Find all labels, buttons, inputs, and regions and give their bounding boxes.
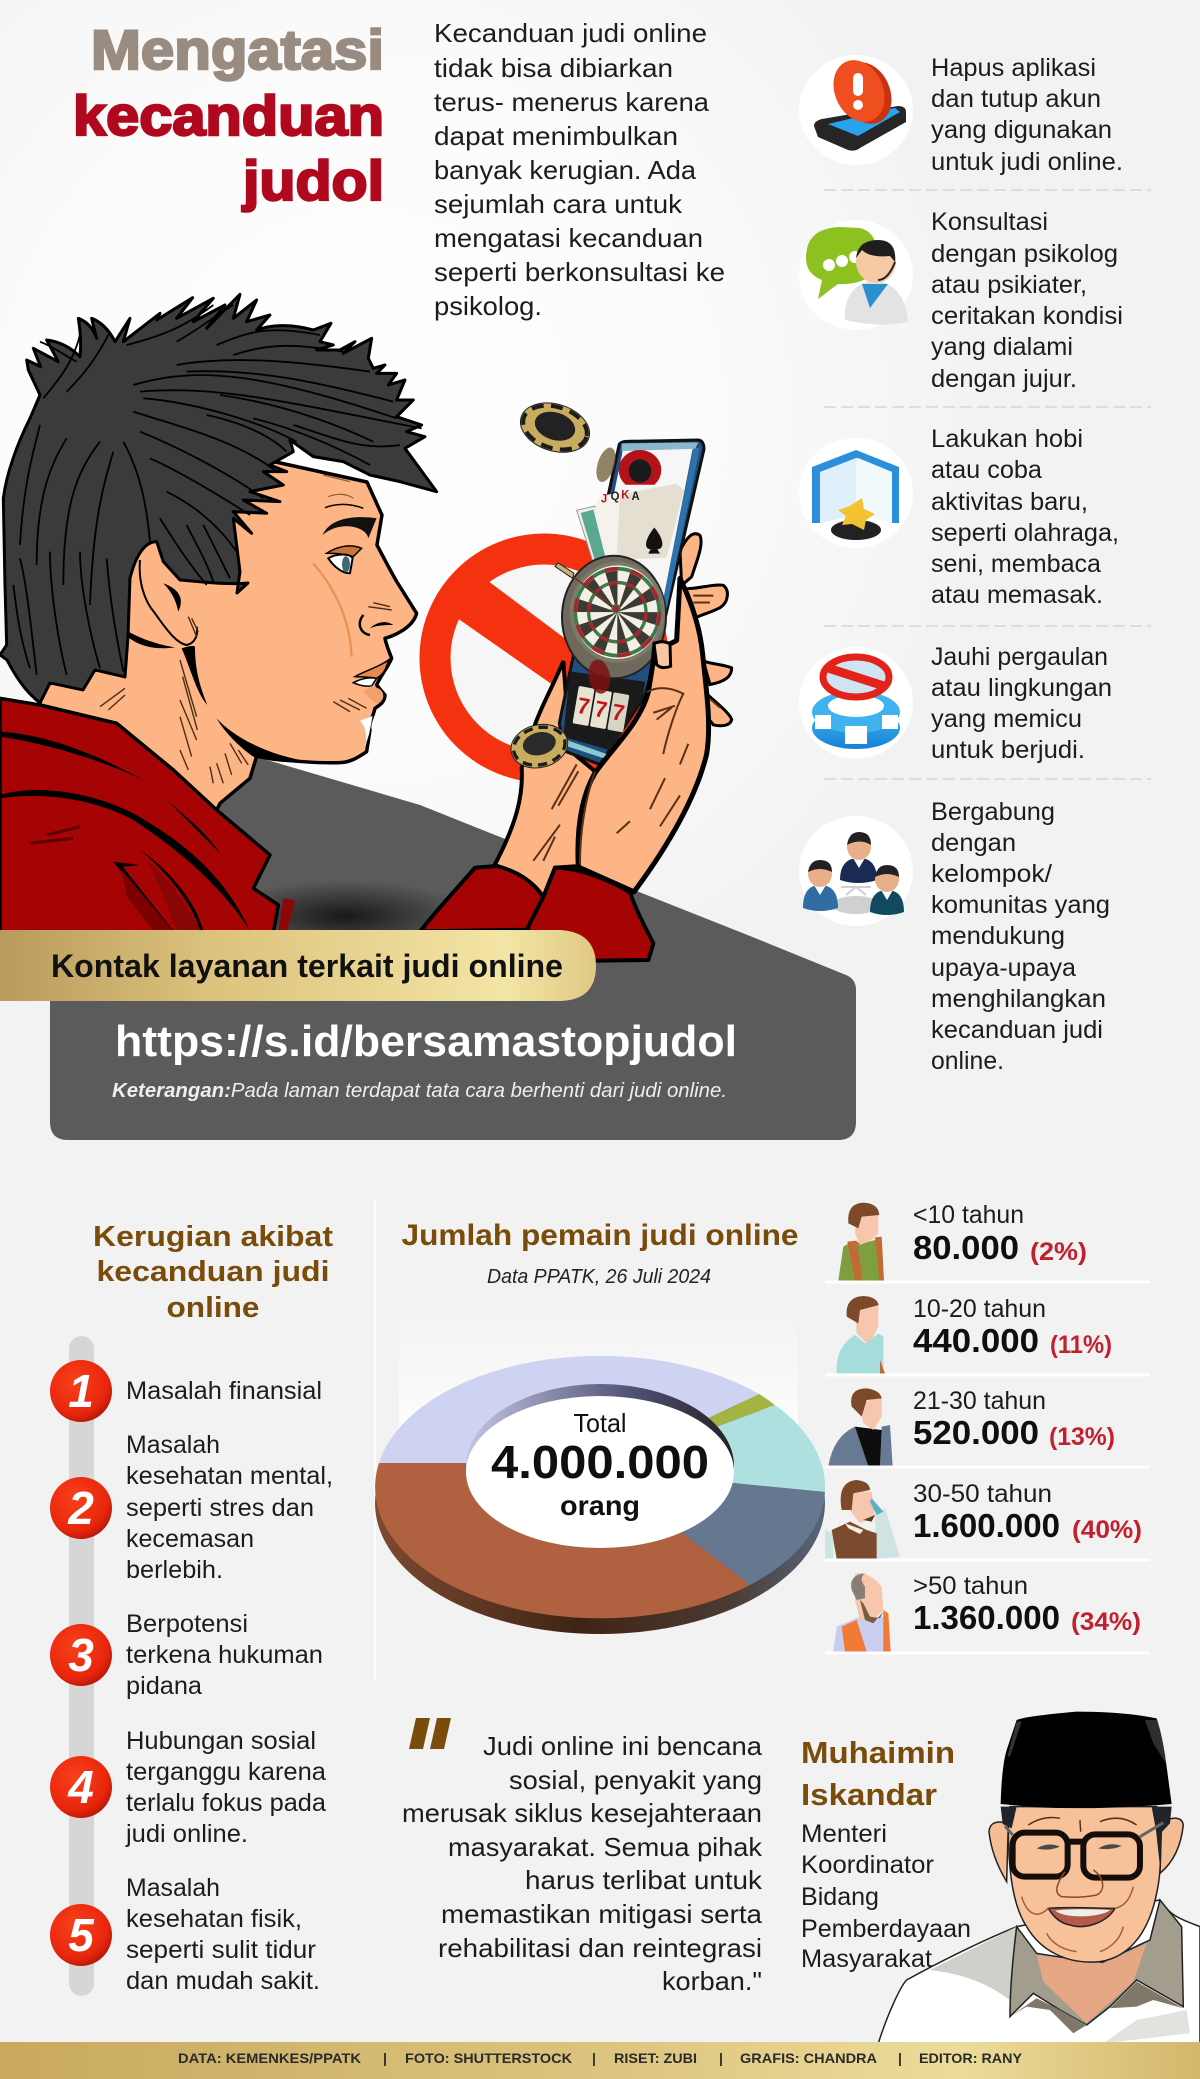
card letters: K [621,489,630,502]
loss 3: terkena hukuman [126,1641,323,1669]
step 4 text [931,643,1112,764]
hole rim [466,1384,734,1548]
segment: 34% lavender [379,1356,759,1470]
footer credits: | [383,2050,387,2066]
loss 5: Masalah [126,1874,220,1902]
age row: 30-50: 1.600.000 [913,1507,1060,1544]
icon: community group [799,816,913,926]
step 1 text: Hapus aplikasi [931,54,1096,82]
intro text [434,18,725,321]
job title: Iskandar [801,1777,937,1812]
contact banner: Kontak layanan terkait judi online [51,948,563,984]
spade [646,527,662,554]
donut total: 4.000.000 [491,1436,709,1488]
forehead lines [323,475,353,498]
phone [555,440,704,764]
sleeves [420,866,543,931]
age row: under 10: <10 tahun [913,1201,1024,1229]
heading: number of players: Jumlah pemain judi online [402,1219,798,1252]
donut chart [375,1305,825,1634]
icon: psychologist [799,220,913,330]
step 4 text: Jauhi pergaulan [931,643,1108,671]
job title [801,1735,971,1973]
panel: losses list [50,1336,333,1996]
hand wrinkles [533,596,720,864]
icon: chip bottom [507,719,572,773]
step 2 text: dengan jujur. [931,365,1077,393]
step 5 text: Bergabung [931,798,1055,826]
card letters: Q [611,491,619,503]
dart [555,563,613,606]
shadow under the arms [220,880,470,952]
step 5 text: upaya-upaya [931,954,1076,982]
nose [1057,1870,1103,1897]
contact banner [0,930,596,1001]
intro text: tidak bisa dibiarkan [434,53,673,83]
step 3 text: Lakukan hobi [931,425,1083,453]
step 1 text: untuk judi online. [931,148,1123,176]
loss 2 [50,1431,333,1584]
avatar: elder [833,1573,891,1652]
neck hatching [100,603,392,783]
brows and lines [1028,1817,1137,1832]
jaw shadow [217,718,310,762]
title [73,18,384,212]
collar [1010,1900,1183,2025]
footer credits: FOTO: SHUTTERSTOCK [405,2050,572,2066]
eyebrow [323,517,377,538]
intro text: sejumlah cara untuk [434,189,683,219]
segment: 40% brown [375,1463,750,1618]
donut total: orang [560,1490,640,1521]
quote text: harus terlibat untuk [525,1865,763,1895]
job title: Bidang [801,1883,879,1911]
job title: Menteri [801,1820,887,1848]
quote text: memastikan mitigasi serta [441,1899,763,1929]
step 2 text: Konsultasi [931,208,1048,236]
step 3 text [931,425,1119,609]
shirt [878,1900,1200,2043]
footer credits: | [592,2050,596,2066]
illustration: man's hair and eye [0,294,437,703]
loss 4: terganggu karena [126,1758,326,1786]
loss 2: Masalah [126,1431,220,1459]
step 5 text [931,798,1110,1075]
shirt [0,698,278,933]
icon: prohibition sign [435,549,653,767]
neck [1037,1943,1147,2023]
footer credits: GRAFIS: CHANDRA [740,2050,877,2066]
donut total: Total [574,1408,626,1438]
illustration: ear lines [128,560,198,648]
loss 2: kecemasan [126,1525,254,1553]
icon: open book and star [799,438,913,548]
quote text: masyarakat. Semua pihak [448,1832,763,1862]
donut total [491,1408,709,1521]
step 5 text: kecanduan judi [931,1016,1103,1044]
loss 2: 2 [67,1482,94,1534]
quote text: sosial, penyakit yang [509,1765,762,1795]
step 2 text: dengan psikolog [931,240,1118,268]
mouth [353,660,388,703]
step 2 text: yang dialami [931,333,1073,361]
loss 1 [50,1360,322,1422]
step 5 text: dengan [931,829,1016,857]
footer credits: | [898,2050,902,2066]
heading: losses [93,1221,333,1324]
step 5 text: mendukung [931,922,1065,950]
hair [0,294,437,703]
step 1 text: yang digunakan [931,116,1112,144]
shirt folds [0,732,250,931]
job title: Masyarakat [801,1945,932,1973]
face and neck [40,460,417,810]
step 3 text: atau memasak. [931,581,1103,609]
hair strands [13,305,422,675]
job title: Muhaimin [801,1735,955,1770]
grey contact panel [50,740,856,1140]
step 5 text: kelompok/ [931,860,1052,888]
intro text: banyak kerugian. Ada [434,155,697,185]
glasses [1013,1833,1140,1878]
quote mark [409,1718,451,1749]
intro text: mengatasi kecanduan [434,223,703,253]
red chip [618,450,662,485]
footer credits: DATA: KEMENKES/PPATK [178,2050,361,2066]
step 1 text: dan tutup akun [931,85,1101,113]
age row: 10-20: 440.000 [913,1322,1039,1359]
loss 1: Masalah finansial [126,1377,322,1405]
cards [577,506,609,573]
step 5 text: komunitas yang [931,891,1110,919]
intro text: seperti berkonsultasi ke [434,257,725,287]
avatar: teen [837,1296,885,1373]
loss 4: 4 [67,1761,94,1813]
step 3 text: atau coba [931,456,1042,484]
face lines [1022,1887,1133,1952]
intro text: terus- menerus karena [434,87,710,117]
panel: age groups [825,1201,1150,1653]
age row: 21-30: 520.000 [913,1414,1039,1451]
eyes [1037,1845,1060,1850]
loss 3 [50,1610,323,1700]
step 4 text: atau lingkungan [931,674,1112,702]
footer credits [0,2042,1200,2079]
panel: steps list [799,52,1151,1075]
card letters [601,489,640,506]
age row: under 10: 80.000 [913,1229,1019,1266]
step 2 text: atau psikiater, [931,271,1087,299]
segment: 13% slate [600,1470,825,1585]
side hair [1001,1807,1172,1867]
step 4 text: untuk berjudi. [931,736,1085,764]
illustration: man's face and shirt [0,460,417,933]
loss 4: judi online. [125,1820,248,1848]
quote text [402,1731,763,1996]
age row: 30-50: (40%) [1072,1516,1142,1544]
footer credits: RISET: ZUBI [614,2050,697,2066]
hole [466,1396,734,1548]
slot machine 777: 7 [593,696,609,723]
step 2 text [931,208,1123,393]
peci cap [1001,1712,1172,1808]
title: kecanduan [73,84,384,147]
loss 2: berlebih. [126,1556,223,1584]
intro text: Kecanduan judi online [434,18,707,48]
portrait: Muhaimin Iskandar [878,1712,1200,2043]
age row: 10-20 [825,1295,1150,1375]
age row: 30-50 [825,1480,1150,1560]
avatar: adult with phone [825,1480,900,1559]
age row: 21-30 [825,1387,1150,1467]
age row: 21-30: (13%) [1049,1423,1115,1451]
title: judol [242,149,384,212]
scar [313,563,352,657]
card letters: J [601,494,607,506]
card letters: A [632,491,640,503]
age row: under 10: (2%) [1030,1238,1087,1266]
slot machine 777: 7 [610,699,626,726]
heading: losses: online [166,1292,260,1324]
footer credits: | [719,2050,723,2066]
icon: chip top [515,395,595,460]
back fingers [680,534,732,726]
step 2 text: ceritakan kondisi [931,302,1123,330]
age row: over 50: (34%) [1071,1608,1141,1636]
age row: 30-50: 30-50 tahun [913,1480,1052,1508]
segment: 11% teal [600,1405,825,1492]
heading: losses: kecanduan judi [96,1256,330,1288]
footer credits: EDITOR: RANY [919,2050,1023,2066]
step 3 text: seperti olahraga, [931,519,1119,547]
nose [370,622,393,628]
title: Mengatasi [91,18,384,81]
eye [327,546,362,573]
step 5 text: online. [931,1047,1004,1075]
data source: Data PPATK, 26 Juli 2024 [487,1266,711,1288]
contact url: https://s.id/bersamastopjudol [115,1017,737,1066]
age row: over 50: 1.360.000 [913,1599,1060,1636]
loss 4 [50,1727,326,1848]
chin highlight [360,716,373,751]
intro text: psikolog. [434,291,542,321]
age row: 21-30: 21-30 tahun [913,1387,1046,1415]
loss 3: 3 [68,1629,94,1681]
loss 5 [50,1874,320,1995]
age row: 10-20: (11%) [1050,1331,1112,1359]
quote text: rehabilitasi dan reintegrasi [438,1933,762,1963]
quote text: Judi online ini bencana [483,1731,763,1761]
illustration: hands, phone and gambling items [420,395,732,961]
loss 5: 5 [68,1909,95,1961]
left hand [495,661,595,897]
loss 3: Berpotensi [126,1610,248,1638]
step 3 text: aktivitas baru, [931,488,1088,516]
ear shadow [182,646,207,705]
avatar: child [838,1203,884,1281]
avatar: young adult [828,1388,893,1466]
step 1 text [931,54,1123,176]
loss 5: seperti sulit tidur [126,1936,316,1964]
quote text: merusak siklus kesejahteraan [402,1798,762,1828]
loss 5: dan mudah sakit. [126,1967,320,1995]
icon: phone alert [799,52,913,165]
right hand [578,578,709,892]
segment: 2% green [600,1394,775,1470]
job title: Koordinator [801,1851,934,1879]
thumbnail [654,642,671,668]
loss 4: terlalu fokus pada [126,1789,326,1817]
loss 2: kesehatan mental, [126,1462,333,1490]
age row: 10-20: 10-20 tahun [913,1295,1046,1323]
dartboard [562,556,666,678]
loss 5: kesehatan fisik, [126,1905,302,1933]
intro text: dapat menimbulkan [434,121,678,151]
mouth [1048,1908,1115,1927]
ears [989,1822,1008,1882]
loss 1: 1 [68,1365,94,1417]
step 4 text: yang memicu [931,705,1082,733]
loss 2: seperti stres dan [126,1494,314,1522]
contact note: Keterangan:Pada laman terdapat tata cara berhenti dari judi online. [112,1080,727,1102]
heading: losses: Kerugian akibat [93,1221,333,1253]
slot machine 777 [573,686,629,732]
timeline bar [69,1336,94,1996]
job title: Pemberdayaan [801,1915,971,1943]
step 3 text: seni, membaca [931,550,1101,578]
slot machine 777: 7 [575,693,592,720]
face [1008,1807,1160,1962]
loss 3: pidana [126,1672,202,1700]
loss 4: Hubungan sosial [126,1727,316,1755]
age row: under 10 [825,1201,1150,1282]
quote text: korban." [662,1966,762,1996]
age row: over 50 [825,1572,1150,1653]
age row: over 50: >50 tahun [913,1572,1028,1600]
step 5 text: menghilangkan [931,985,1106,1013]
icon: chips with ban [799,647,913,759]
blurred chip [593,445,619,484]
